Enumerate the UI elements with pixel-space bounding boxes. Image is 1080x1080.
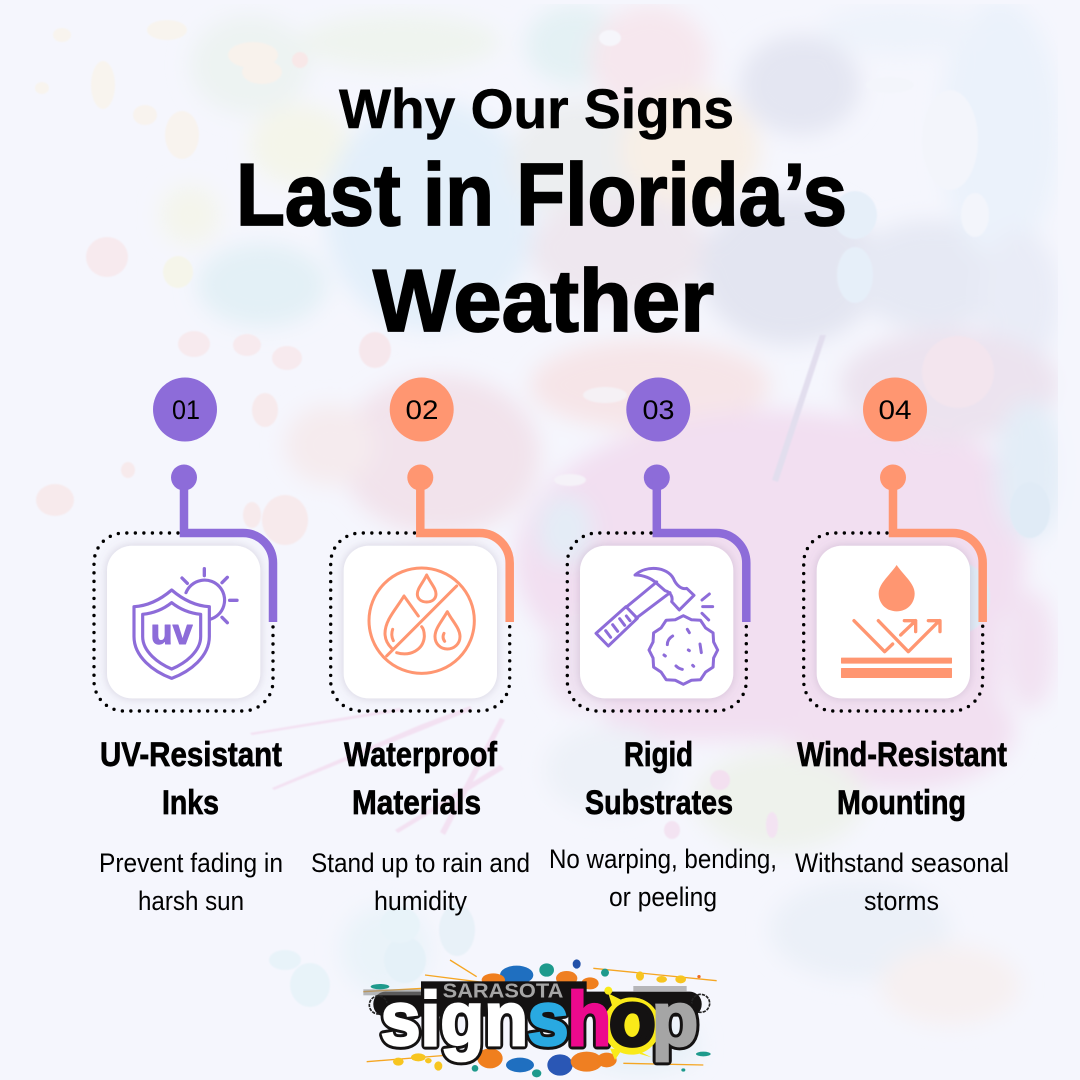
heading: Wind-Resistant — [797, 736, 1007, 774]
number badge 04 — [863, 378, 927, 442]
title line: Why Our Signs: Why Our Signs — [339, 77, 734, 140]
description: Withstand seasonal — [795, 848, 1009, 878]
heading: Materials — [352, 784, 481, 822]
heading — [797, 736, 1007, 822]
number badge 03: 03 — [642, 395, 674, 425]
heading: UV-Resistant — [100, 736, 282, 774]
logo outline behind letters — [381, 977, 698, 1062]
number badge 04: 04 — [878, 395, 912, 425]
heading: Mounting — [837, 784, 966, 822]
logo grunge band — [363, 986, 710, 1017]
number badge 02 — [390, 378, 454, 442]
number badge 01: 01 — [172, 395, 200, 425]
description — [549, 844, 777, 912]
logo: Sarasota Signshop — [363, 959, 717, 1077]
number badge 03 — [626, 378, 690, 442]
logo outline behind letters: p — [652, 977, 698, 1062]
icon: hammer and rock — [596, 568, 718, 684]
icon: no water drops — [369, 568, 474, 673]
connector — [407, 464, 510, 622]
heading — [100, 736, 282, 822]
dotted frame — [94, 533, 273, 711]
title — [236, 77, 847, 350]
title line: Last in Florida's: Last in Florida’s — [236, 145, 847, 244]
description — [311, 848, 530, 916]
description — [99, 848, 283, 916]
logo wordmark: p — [652, 977, 698, 1062]
icon: water drop deflecting off layered surface — [841, 565, 952, 678]
description: harsh sun — [138, 886, 244, 916]
logo yellow o counter — [624, 1014, 640, 1037]
icon card — [817, 546, 970, 698]
description: storms — [864, 886, 939, 916]
logo wordmark: o — [609, 977, 655, 1062]
logo black backing — [421, 981, 587, 1015]
connector — [880, 464, 983, 622]
heading — [344, 736, 498, 822]
icon: UV shield and sun: uv — [151, 611, 193, 652]
description: No warping, bending, — [549, 844, 777, 874]
number badge 02: 02 — [406, 395, 438, 425]
title line: Weather: Weather — [373, 251, 714, 350]
dotted frame — [567, 533, 746, 711]
heading: Inks — [162, 784, 219, 822]
connector — [171, 464, 273, 622]
heading: Rigid — [624, 736, 693, 774]
step 03: Rigid Substrates — [549, 378, 777, 912]
logo wordmark: SARASOTA — [443, 980, 563, 1003]
logo yellow splat — [597, 987, 664, 1060]
dotted frame — [331, 533, 510, 711]
description: Stand up to rain and — [311, 848, 530, 878]
step 01: UV-Resistant Inks — [94, 378, 283, 916]
logo outline behind letters: h — [567, 977, 611, 1062]
logo wordmark: h — [567, 977, 611, 1062]
heading — [585, 736, 733, 822]
logo wordmark: sign — [381, 977, 528, 1062]
dotted frame — [804, 533, 983, 711]
connector — [644, 464, 746, 622]
description: Prevent fading in — [99, 848, 283, 878]
logo paint splatter — [363, 959, 717, 1077]
icon card — [580, 546, 733, 698]
number badge 01 — [153, 378, 217, 442]
icon card — [107, 546, 260, 698]
description — [795, 848, 1009, 916]
description: humidity — [374, 886, 467, 916]
description: or peeling — [609, 882, 717, 912]
icon card — [344, 546, 497, 698]
step 04: Wind-Resistant Mounting — [795, 378, 1009, 916]
logo wordmark — [381, 977, 698, 1062]
logo wordmark: s — [527, 977, 569, 1062]
logo outline behind letters: s — [527, 977, 569, 1062]
heading: Waterproof — [344, 736, 498, 774]
heading: Substrates — [585, 784, 733, 822]
step 02: Waterproof Materials — [311, 378, 530, 916]
logo outline behind letters: sign — [381, 977, 528, 1062]
icon: UV shield and sun — [134, 569, 237, 678]
